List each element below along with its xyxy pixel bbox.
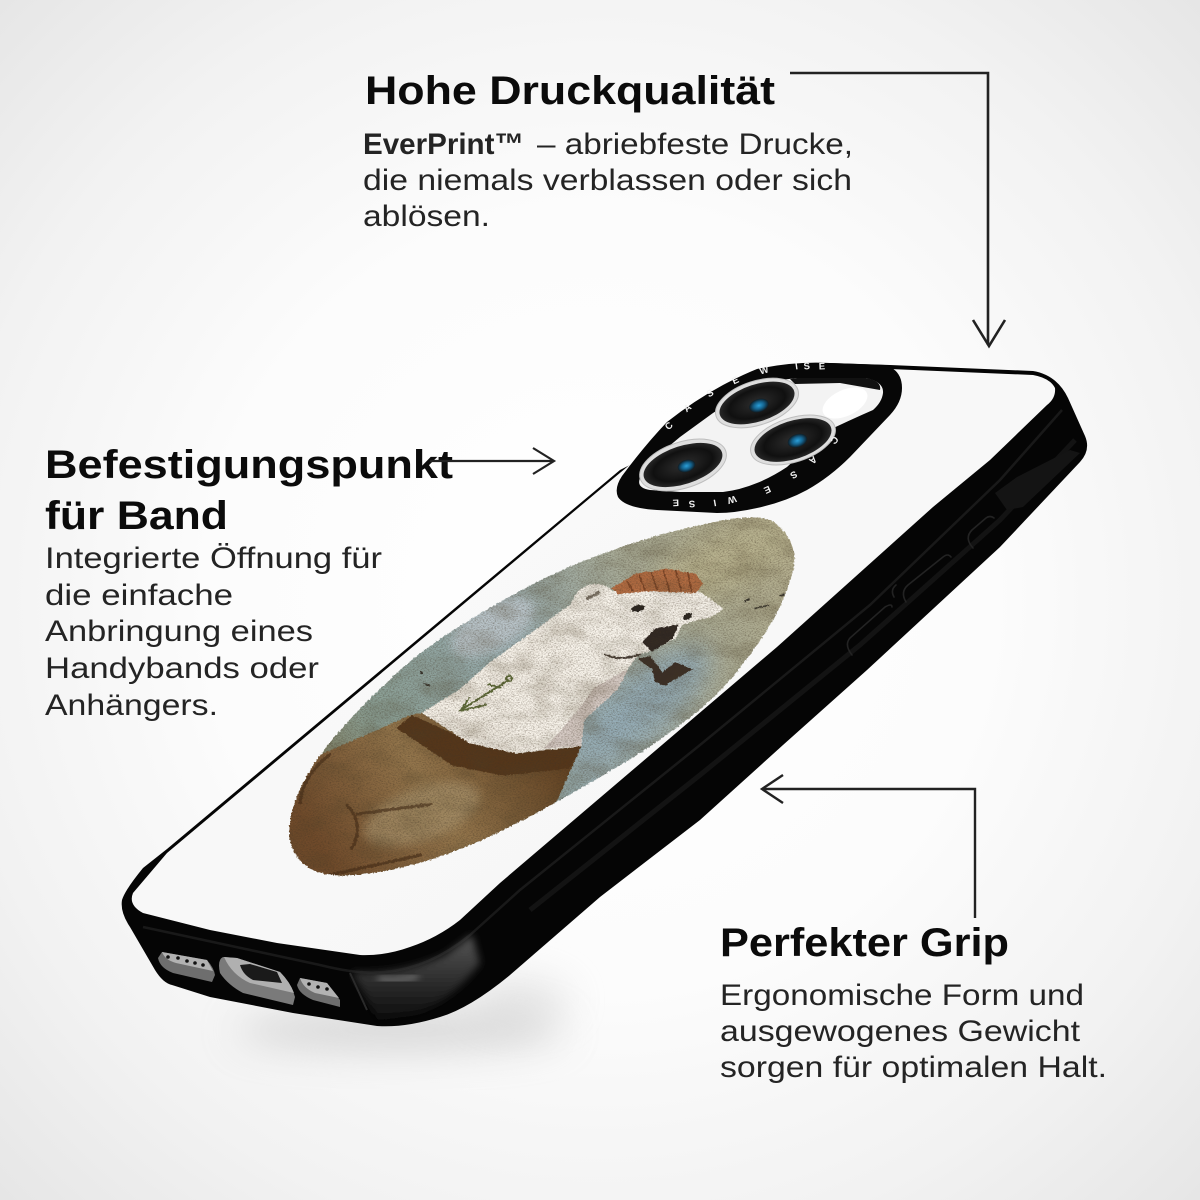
body text: sorgen für optimalen Halt. — [720, 1051, 1107, 1084]
birds — [420, 594, 785, 685]
heading — [45, 443, 453, 538]
body text — [45, 542, 382, 722]
body text: Handybands oder — [45, 652, 319, 685]
sweater collar — [397, 715, 581, 776]
lens left — [633, 429, 733, 501]
eyes — [586, 592, 694, 622]
body text: ausgewogenes Gewicht — [720, 1015, 1081, 1048]
body text — [363, 128, 853, 233]
body text — [720, 979, 1107, 1084]
lens right — [744, 405, 842, 475]
body text: ablösen. — [363, 200, 490, 233]
phone case — [122, 361, 1087, 1026]
brand text bottom: CASEWISE — [672, 433, 840, 509]
arrow: strap attachment — [430, 448, 554, 474]
body text: die niemals verblassen oder sich — [363, 164, 852, 197]
arrow: print quality — [790, 73, 1005, 346]
opening top shadow — [790, 378, 880, 390]
body text: – abriebfeste Drucke, — [537, 128, 853, 161]
body text: die einfache — [45, 579, 233, 612]
body text: EverPrint™ — [363, 128, 524, 161]
sweater — [288, 712, 582, 876]
bottom corner sheen — [350, 935, 480, 1020]
nose — [642, 625, 679, 652]
heading: Perfekter Grip — [720, 921, 1009, 965]
heading: Befestigungspunkt — [45, 443, 453, 487]
body text: Ergonomische Form und — [720, 979, 1084, 1012]
anchor tattoo — [459, 676, 512, 711]
callout: grip — [720, 921, 1107, 1084]
printed artwork: polar bear oval — [288, 517, 796, 876]
camera opening — [639, 378, 883, 492]
hat — [612, 569, 703, 594]
left speaker grille — [158, 952, 215, 982]
case body — [122, 363, 1087, 1026]
phone drop shadow — [235, 978, 570, 1050]
side bevel lines — [143, 410, 1075, 973]
back face — [132, 369, 1055, 955]
callout: print quality — [363, 69, 853, 233]
camera module — [617, 361, 902, 513]
side switch — [995, 450, 1080, 510]
bear — [422, 584, 723, 753]
artwork background — [288, 517, 796, 876]
callout: strap attachment — [45, 443, 453, 722]
right speaker grille — [297, 978, 340, 1007]
body text: Anhängers. — [45, 689, 218, 722]
heading: für Band — [45, 494, 228, 538]
charging port — [219, 957, 295, 1005]
heading: Hohe Druckqualität — [365, 69, 775, 113]
bear shadow side — [544, 669, 628, 748]
camera ring — [617, 363, 902, 513]
body text: Anbringung eines — [45, 615, 313, 648]
lens top — [709, 369, 805, 437]
side buttons — [847, 516, 994, 655]
brand text top: CASEWISE — [663, 361, 825, 433]
arrow: grip — [762, 775, 975, 918]
body text: Integrierte Öffnung für — [45, 542, 382, 575]
pipe — [638, 656, 693, 685]
